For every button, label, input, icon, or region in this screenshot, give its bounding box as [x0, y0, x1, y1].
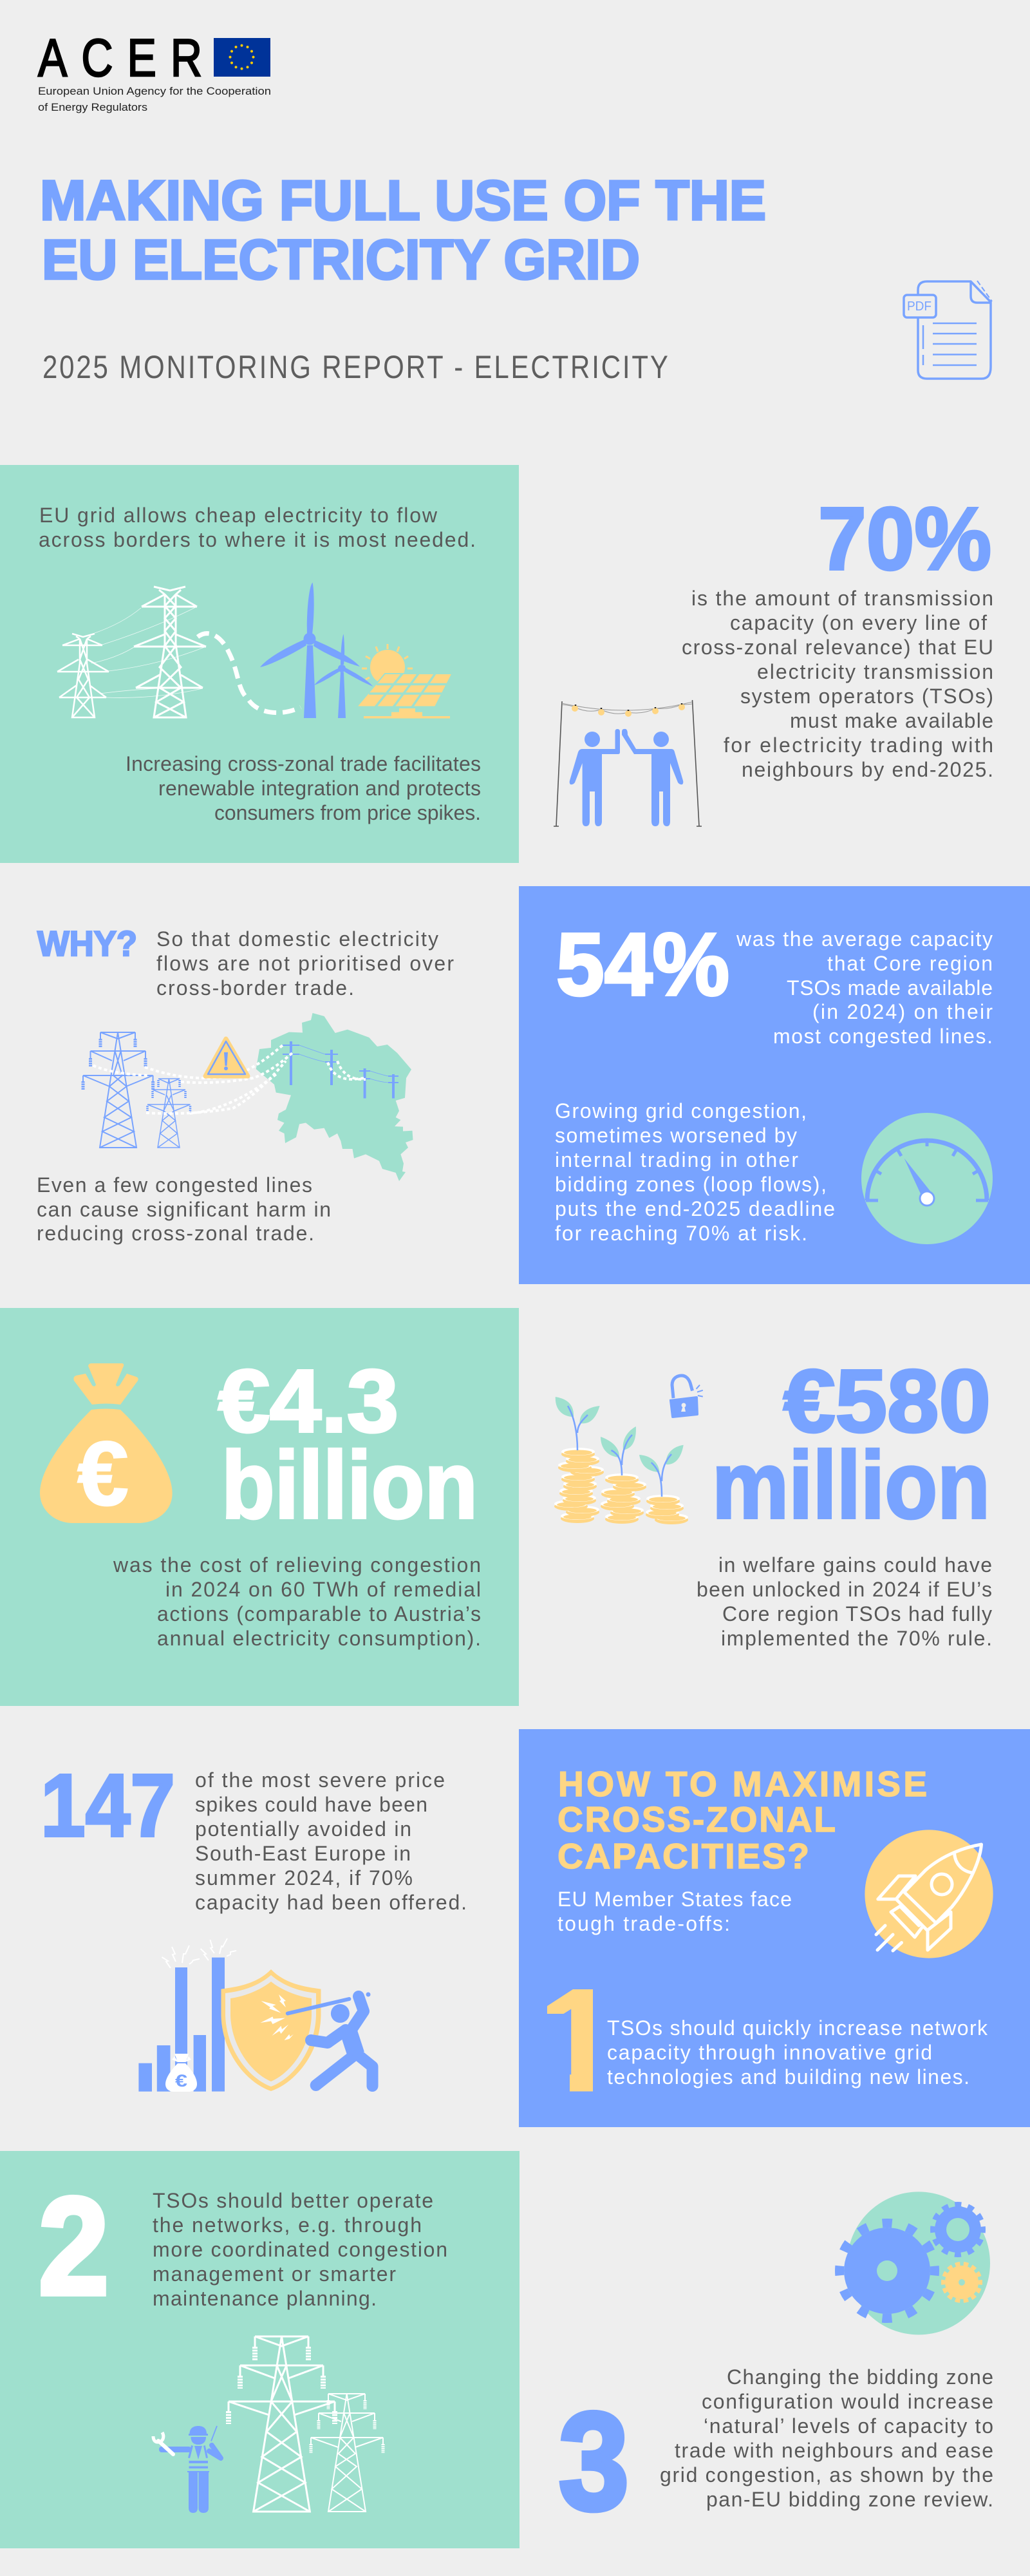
icon: wind turbines [260, 582, 373, 718]
text: trade-offs [557, 1888, 792, 1935]
text: price spikes: South-East Europe in [195, 1842, 411, 1865]
text: congested lines: can cause significant harm in [37, 1198, 331, 1221]
panel: EU grid [0, 465, 519, 863]
icon: person striking shield [288, 1993, 372, 2086]
text: grid intro: EU grid allows cheap electricity to flow [39, 504, 438, 527]
text: step 2 [153, 2189, 447, 2310]
text: growing grid congestion: Growing grid congestion, [555, 1099, 807, 1122]
text: 70% definition: capacity (on every line of [730, 611, 987, 634]
text: step 3 [660, 2365, 993, 2511]
text: cross-zonal trade [126, 752, 481, 824]
text: 70% definition [682, 587, 993, 781]
stat: 4.3 billion: €4.3 [218, 1352, 398, 1451]
text: price spikes: potentially avoided in [195, 1817, 411, 1841]
text: step 3: trade with neighbours and ease [675, 2439, 993, 2462]
text: price spikes: capacity had been offered. [195, 1891, 467, 1914]
text: grid intro: across borders to where it is most needed. [39, 528, 476, 551]
text: cost of congestion [113, 1553, 481, 1650]
text: step 2: more coordinated congestion [153, 2238, 447, 2261]
icon: PDF document: PDF [907, 299, 932, 314]
text: 70% definition: neighbours by end-2025. [742, 758, 993, 781]
text: trade-offs: tough trade-offs: [557, 1912, 730, 1935]
illustration: utility poles [283, 1041, 398, 1099]
text: welfare gains: been unlocked in 2024 if EU’s [697, 1578, 992, 1601]
text: price spikes: spikes could have been [195, 1793, 427, 1816]
heading: how to maximise [557, 1764, 927, 1876]
text: congested lines [37, 1173, 331, 1245]
bar chart: price spikes [138, 1958, 225, 2092]
text: welfare gains: in welfare gains could have [718, 1553, 992, 1577]
text: step 2: management or smarter [153, 2262, 396, 2286]
icon: gears [839, 2192, 990, 2334]
text: cross-zonal trade: consumers from price spikes. [214, 801, 481, 824]
big gear [839, 2223, 935, 2318]
text: step 3: pan-EU bidding zone review. [706, 2488, 993, 2511]
text: price spikes: of the most severe price [195, 1768, 445, 1792]
title: EU ELECTRICITY GRID [42, 229, 640, 291]
title [40, 169, 766, 291]
text: step 1: capacity through innovative grid [607, 2041, 932, 2064]
heading: how to maximise: CROSS-ZONAL [557, 1799, 836, 1839]
text: growing grid congestion: sometimes worsened by [555, 1124, 797, 1147]
text: growing grid congestion: for reaching 70% at risk. [555, 1222, 807, 1245]
text: 70% definition: cross-zonal relevance) that EU [682, 636, 993, 659]
logo: ACER: of Energy Regulators [38, 101, 147, 113]
icon: maintenance worker [153, 2426, 221, 2513]
text: 54% definition: that Core region [827, 952, 993, 975]
icon: money bag [40, 1363, 173, 1525]
text: step 1: TSOs should quickly increase network [607, 2016, 988, 2040]
text: growing grid congestion: puts the end-2025 deadline [555, 1197, 835, 1220]
text: 54% definition: most congested lines. [773, 1025, 993, 1048]
stat: 70%: 70% [818, 489, 991, 589]
icon: shield [221, 1969, 321, 2091]
heading: WHY?: WHY? [37, 923, 137, 963]
stat: 580 million: €580 [783, 1352, 991, 1451]
text: 54% definition: TSOs made available [787, 976, 993, 999]
text: 70% definition: system operators (TSOs) [740, 685, 993, 708]
icon: warning triangle [205, 1039, 248, 1076]
plant stems and leaves [556, 1397, 684, 1497]
text: step 3: ‘natural’ levels of capacity to [704, 2414, 993, 2438]
numeral: 3: 3 [559, 2383, 629, 2539]
text: 70% definition: is the amount of transmission [691, 587, 993, 610]
text: step 2: maintenance planning. [153, 2287, 377, 2310]
panel: 54% [519, 886, 1030, 1284]
stat: 70% [682, 489, 993, 781]
text: step 1: technologies and building new lines. [607, 2065, 969, 2088]
text: 54% definition: was the average capacity [736, 927, 993, 951]
text: 54% definition [736, 927, 993, 1048]
logo: ACER [38, 28, 271, 113]
icon: open padlock [670, 1376, 703, 1418]
numeral: 2: 2 [39, 2168, 109, 2324]
panel: step 2 [0, 2151, 520, 2548]
text: welfare gains: implemented the 70% rule. [721, 1627, 992, 1650]
text: cost of congestion: actions (comparable to Austria’s [157, 1602, 481, 1625]
text: cross-zonal trade: renewable integration and protects [158, 777, 481, 800]
panel: 147 price spikes [41, 1756, 467, 2092]
stat: 580 million [697, 1352, 992, 1650]
text: cost of congestion: was the cost of relieving congestion [113, 1553, 481, 1577]
icon: PDF document [904, 281, 992, 379]
numeral: 1: 1 [538, 1958, 619, 2121]
illustration: blue pylons [83, 1032, 191, 1148]
text: welfare gains: Core region TSOs had fully [722, 1602, 992, 1625]
medium gear [933, 2204, 983, 2255]
small gear [943, 2264, 980, 2301]
text: why explanation [156, 927, 454, 999]
text: why explanation: flows are not prioritised over [156, 952, 454, 975]
stat: 580 million: million [712, 1432, 990, 1539]
title: MAKING FULL USE OF THE [40, 169, 766, 232]
illustration: pylons [57, 587, 206, 717]
illustration: coins and seedlings [554, 1397, 688, 1524]
arrow: dashed cable [198, 634, 301, 713]
text: step 1 [607, 2016, 988, 2088]
icon: small money bag [165, 2054, 197, 2092]
text: growing grid congestion [555, 1099, 835, 1245]
text: step 2: the networks, e.g. through [153, 2213, 422, 2237]
coin stacks [554, 1448, 688, 1524]
icon: small money bag: € [175, 2071, 187, 2090]
icon: sun and solar panel [357, 644, 452, 719]
heading: how to maximise: HOW TO MAXIMISE [558, 1764, 927, 1804]
heading: how to maximise: CAPACITIES? [557, 1836, 809, 1876]
arrow: congested flows [93, 1045, 366, 1113]
text: why explanation: So that domestic electricity [156, 927, 438, 951]
text: welfare gains [697, 1553, 992, 1650]
illustration: high five under lights [554, 700, 702, 826]
text: why explanation: cross-border trade. [156, 976, 354, 999]
text: grid intro [39, 504, 476, 551]
logo: ACER: European Union Agency for the Cooperation [38, 85, 271, 97]
icon: spark bursts [162, 1938, 236, 1968]
text: 70% definition: must make available [790, 709, 993, 732]
text: step 3: grid congestion, as shown by the [660, 2463, 993, 2486]
panel: how to maximise [519, 1729, 1030, 2127]
text: cost of congestion: annual electricity consumption). [157, 1627, 481, 1650]
icon: speedometer [861, 1113, 993, 1244]
text: growing grid congestion: bidding zones (loop flows), [555, 1173, 827, 1196]
icon: EU flag [214, 38, 270, 77]
text: 70% definition: for electricity trading with [724, 734, 993, 757]
map: Core region [256, 1013, 413, 1181]
panel: 4.3 billion [0, 1308, 519, 1706]
text: congested lines: Even a few congested lines [37, 1173, 312, 1197]
stat: 147: 147 [41, 1756, 175, 1855]
panel: why [37, 923, 454, 1245]
illustration: white pylons [229, 2336, 383, 2512]
text: trade-offs: EU Member States face [557, 1888, 792, 1911]
text: cost of congestion: in 2024 on 60 TWh of remedial [165, 1578, 481, 1601]
text: cross-zonal trade: Increasing cross-zonal trade facilitates [126, 752, 481, 775]
icon: money bag: € [77, 1423, 129, 1525]
text: step 3: Changing the bidding zone [727, 2365, 993, 2389]
text: congested lines: reducing cross-zonal trade. [37, 1222, 314, 1245]
stat: 54%: 54% [556, 915, 729, 1014]
text: 54% definition: (in 2024) on their [812, 1000, 993, 1023]
icon: rocket [865, 1830, 993, 1958]
text: growing grid congestion: internal trading in other [555, 1148, 798, 1171]
text: step 2: TSOs should better operate [153, 2189, 433, 2212]
text: step 3: configuration would increase [702, 2390, 993, 2413]
text: price spikes: summer 2024, if 70% [195, 1866, 413, 1889]
text: 70% definition: electricity transmission [757, 660, 993, 683]
logo: ACER: ACER [38, 28, 202, 88]
stat: 4.3 billion [218, 1352, 478, 1539]
text: price spikes [195, 1768, 467, 1914]
panel: step 3 [559, 2192, 993, 2539]
subtitle: 2025 MONITORING REPORT - ELECTRICITY [42, 349, 668, 385]
stat: 4.3 billion: billion [221, 1432, 478, 1539]
